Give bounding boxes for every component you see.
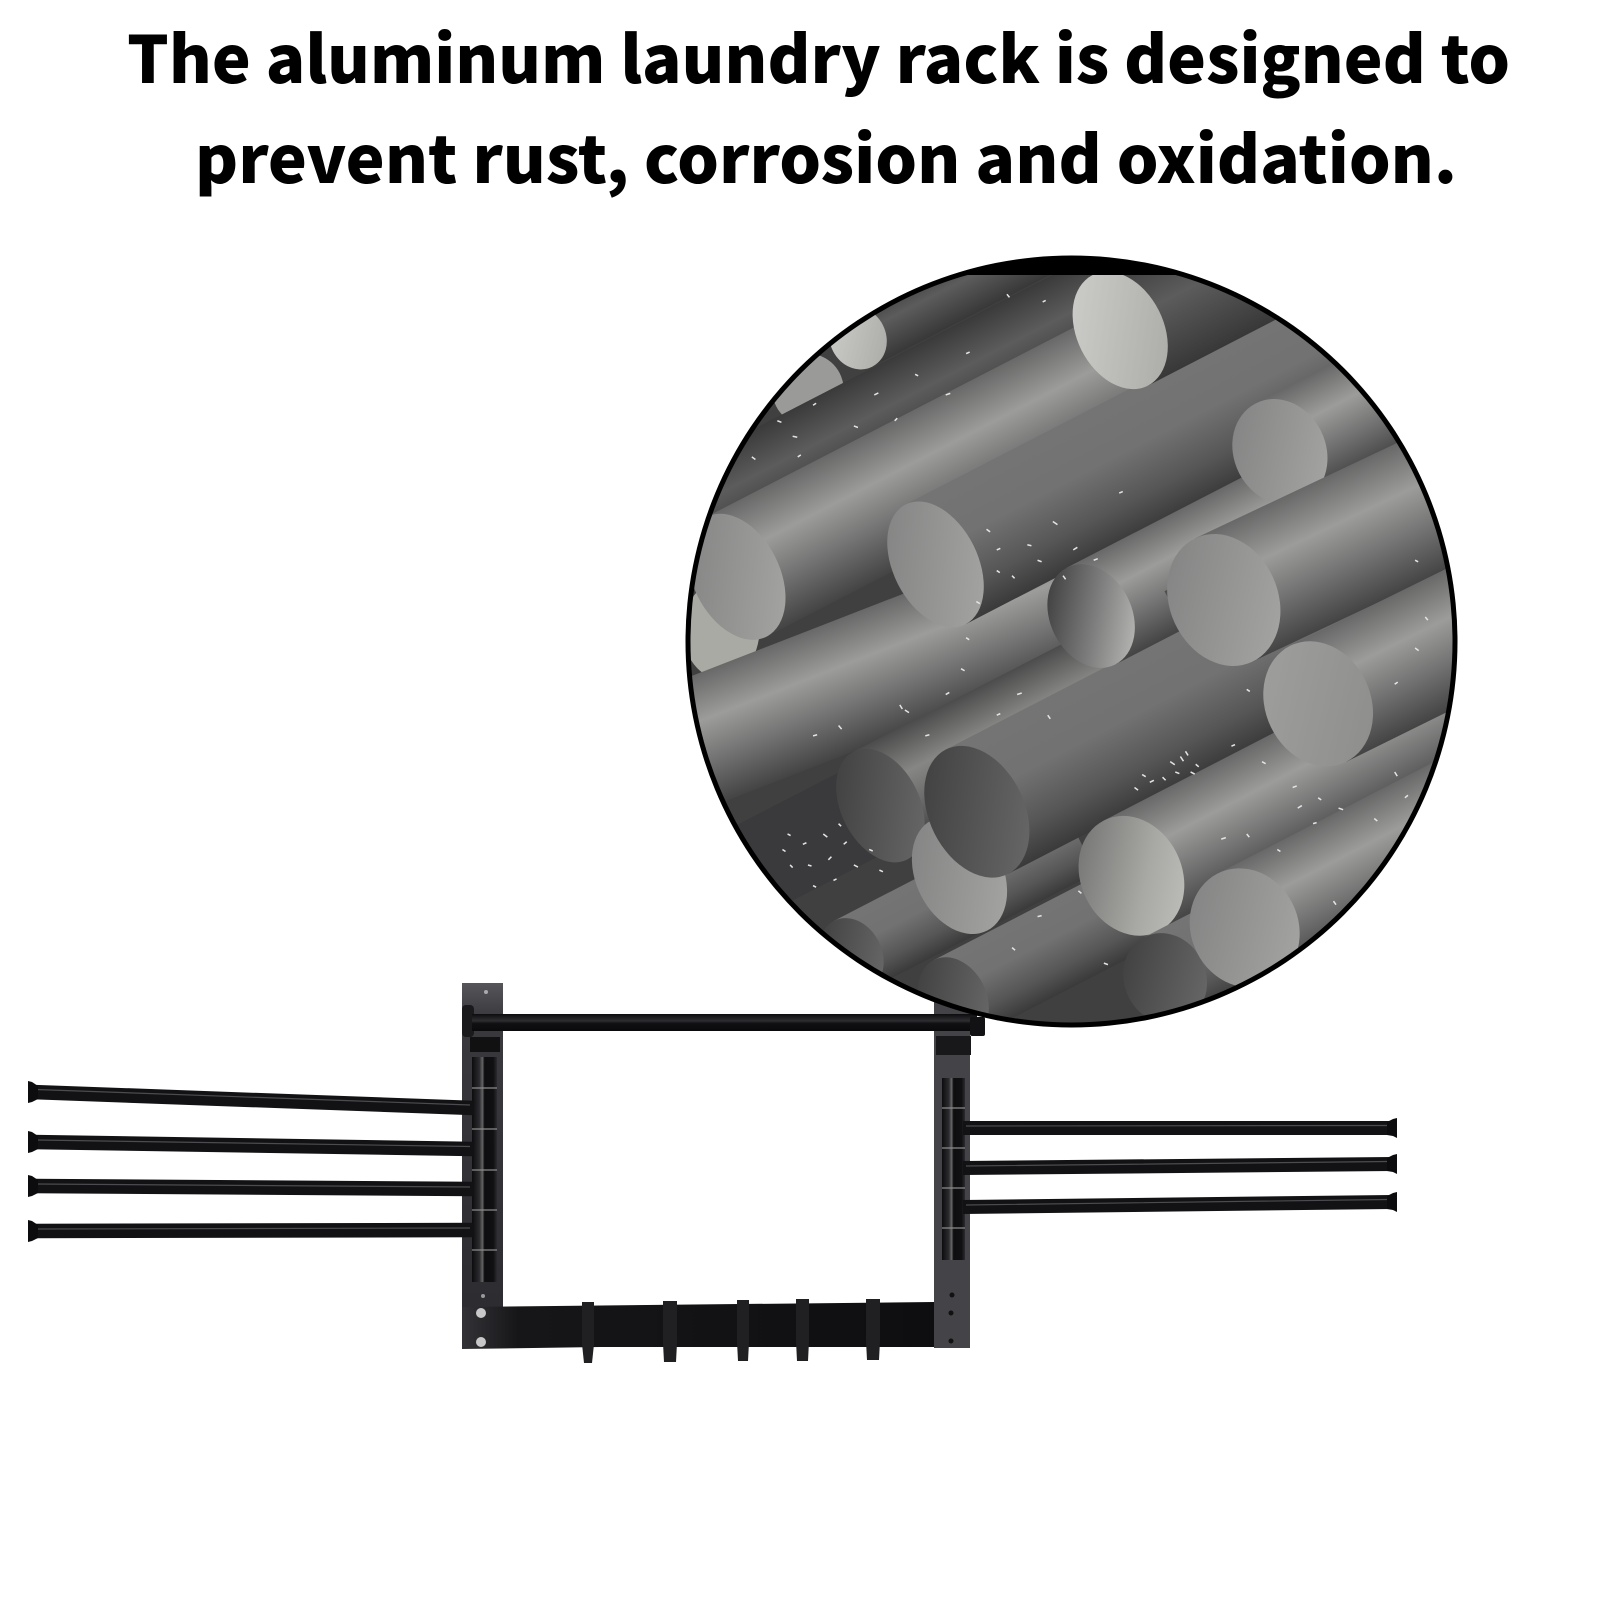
laundry rack product bbox=[28, 983, 1397, 1363]
circle border bbox=[686, 256, 1458, 1028]
title: prevent rust, corrosion and oxidation. bbox=[195, 108, 1457, 202]
right wall plate bbox=[934, 1000, 971, 1348]
title: The aluminum laundry rack is designed to bbox=[127, 8, 1510, 102]
hooks bbox=[582, 1299, 880, 1363]
left vertical rail bbox=[472, 1057, 497, 1282]
bottom hook bar bbox=[462, 1302, 934, 1349]
right swing arms bbox=[963, 1118, 1397, 1212]
metal rods photo bbox=[690, 275, 1452, 1022]
left swing arms bbox=[28, 1081, 474, 1242]
right vertical rail bbox=[942, 1078, 965, 1260]
magnified metal rods circle bbox=[686, 256, 1458, 1028]
title bbox=[127, 8, 1510, 202]
left wall plate bbox=[462, 983, 503, 1323]
top bar bbox=[462, 1005, 985, 1037]
metal shavings bbox=[752, 294, 1428, 965]
